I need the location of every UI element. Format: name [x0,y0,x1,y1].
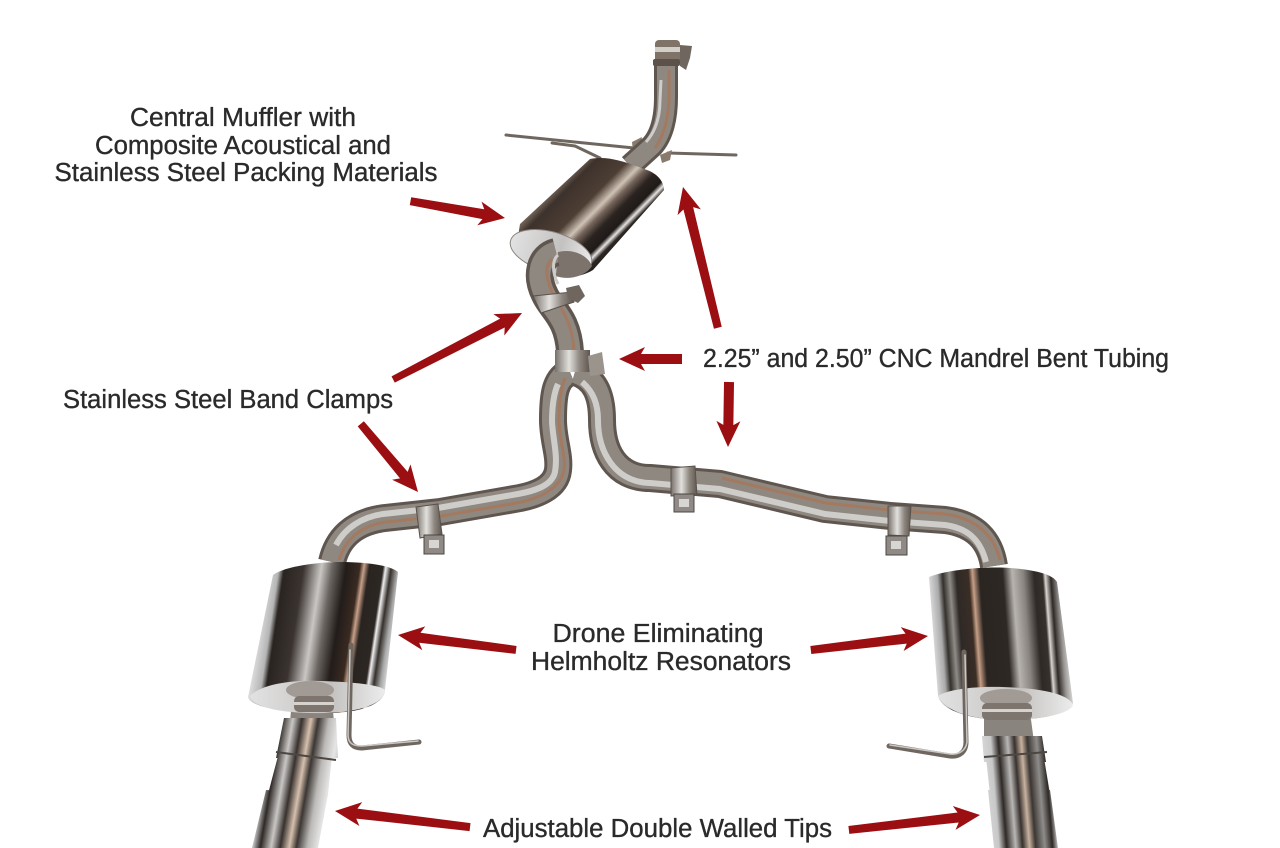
arrow: tubing to right branch [716,382,741,447]
label: central muffler [54,104,438,187]
inlet pipe [630,64,669,166]
left tailpipe and tip [252,700,338,848]
arrow: to left resonator [396,623,518,662]
arrow: to right resonator [809,624,929,662]
label: mandrel bent tubing: 2.25” and 2.50” CNC Mandrel Bent Tubing [703,345,1169,373]
right tailpipe and tip [982,712,1058,848]
middle pipe clamp [671,466,697,512]
label: helmholtz resonators [531,620,791,676]
arrow: tubing to junction [619,347,682,371]
arrow: to upper clamp [387,302,527,390]
left pipe clamp [416,504,444,554]
arrow: to left tip [334,799,471,839]
label: helmholtz resonators: Helmholtz Resonators [531,648,791,676]
label: central muffler: Composite Acoustical and [95,132,391,160]
arrow: to central muffler [408,189,507,230]
exhaust system photo illustration [248,40,1073,848]
right resonator hanger rod [889,652,967,756]
lower band clamp [555,350,605,376]
left resonator hanger rod [348,645,419,748]
right branch pipe [575,372,1000,566]
label: double walled tips: Adjustable Double Walled Tips [483,815,832,843]
left resonator [248,562,398,713]
upper band clamp [533,285,585,313]
label: band clamps: Stainless Steel Band Clamps [63,386,393,414]
label: helmholtz resonators: Drone Eliminating [552,620,764,648]
arrow: to right tip [847,803,981,842]
arrow: tubing to inlet pipe [671,184,729,331]
right resonator [929,567,1073,720]
label: central muffler: Stainless Steel Packing Materials [54,159,438,187]
S-bend pipe below muffler [540,252,574,352]
hanger rods of central muffler [506,135,736,163]
left branch pipe [332,372,570,562]
arrow: to left pipe clamp [352,416,427,500]
label: central muffler: Central Muffler with [130,104,356,132]
right pipe clamp [886,506,911,555]
inlet band clamp [653,40,692,70]
central muffler [505,158,664,283]
